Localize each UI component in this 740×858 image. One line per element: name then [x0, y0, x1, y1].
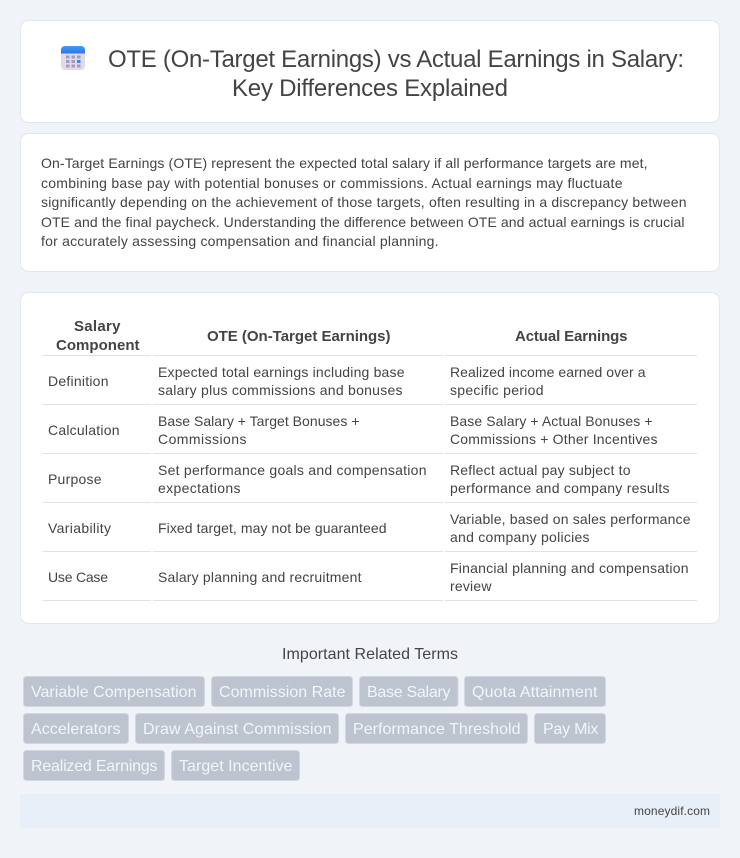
row: Purpose: performance and company results — [450, 480, 670, 496]
related term tags: Pay Mix — [543, 721, 598, 738]
row: Use Case: Use Case — [48, 569, 108, 585]
title: Key Differences Explained — [232, 75, 508, 102]
related term tags: Target Incentive — [179, 758, 293, 775]
row: Purpose: Reflect actual pay subject to — [450, 462, 631, 478]
table header: Salary — [74, 318, 121, 335]
row: Definition: Definition — [48, 373, 108, 389]
row: Definition: specific period — [450, 382, 544, 398]
footer bar — [20, 794, 720, 828]
heading: related terms: Important Related Terms — [282, 646, 458, 663]
related term tags: Realized Earnings — [31, 758, 158, 775]
row: Purpose: Set performance goals and compensation — [158, 462, 426, 478]
title: OTE (On-Target Earnings) vs Actual Earnings in Salary: — [108, 46, 684, 73]
intro text: On-Target Earnings (OTE) represent the expected total salary if all performance targets are met, — [41, 155, 648, 171]
intro text: significantly depending on the achievement of those targets, often resulting in a discrepancy between — [41, 194, 686, 210]
row: Use Case: Salary planning and recruitment — [158, 569, 362, 585]
related term tags: Accelerators — [31, 721, 120, 738]
row: Calculation: Commissions — [158, 431, 246, 447]
intro text — [41, 155, 686, 249]
row: Definition — [48, 364, 646, 398]
row: Use Case — [48, 560, 688, 594]
row: Variability: Fixed target, may not be guaranteed — [158, 520, 386, 536]
row: Variability: and company policies — [450, 529, 590, 545]
table header: Component — [56, 337, 140, 354]
intro text: for accurately assessing compensation and financial planning. — [41, 233, 438, 249]
related term tags: Base Salary — [367, 684, 450, 701]
row: Calculation — [48, 413, 658, 447]
row: Purpose — [48, 462, 670, 496]
row: Use Case: review — [450, 578, 492, 594]
footer source text: moneydif.com — [634, 804, 710, 818]
row: Calculation: Calculation — [48, 422, 120, 438]
row: Definition: Expected total earnings including base — [158, 364, 405, 380]
row: Variability — [48, 511, 691, 545]
row: Variability: Variable, based on sales performance — [450, 511, 691, 527]
row: Definition: salary plus commissions and bonuses — [158, 382, 402, 398]
row: Calculation: Base Salary + Target Bonuses + — [158, 413, 360, 429]
row: Purpose: expectations — [158, 480, 240, 496]
row: Definition: Realized income earned over a — [450, 364, 646, 380]
header panel — [20, 20, 720, 122]
table header — [56, 318, 628, 354]
title — [108, 46, 684, 102]
icon: calendar — [61, 46, 85, 70]
table header: Actual Earnings — [515, 328, 628, 345]
row: Purpose: Purpose — [48, 471, 102, 487]
related term tags: Variable Compensation — [31, 684, 196, 701]
intro text: OTE and the final paycheck. Understanding the difference between OTE and actual earnings is crucial — [41, 214, 684, 230]
related term tags: Quota Attainment — [472, 684, 598, 701]
panel: intro — [20, 134, 720, 272]
related term tags: Commission Rate — [219, 684, 346, 701]
intro text: combining base pay with potential bonuses or commissions. Actual earnings may fluctuate — [41, 175, 623, 191]
row: Calculation: Commissions + Other Incentives — [450, 431, 658, 447]
related term tags — [24, 676, 606, 780]
panel: comparison table — [20, 292, 720, 624]
table header: OTE (On-Target Earnings) — [207, 328, 390, 345]
row: Calculation: Base Salary + Actual Bonuses + — [450, 413, 652, 429]
row: Variability: Variability — [48, 520, 111, 536]
related term tags: Draw Against Commission — [143, 721, 332, 738]
related term tags: Performance Threshold — [353, 721, 520, 738]
row: Use Case: Financial planning and compensation — [450, 560, 688, 576]
